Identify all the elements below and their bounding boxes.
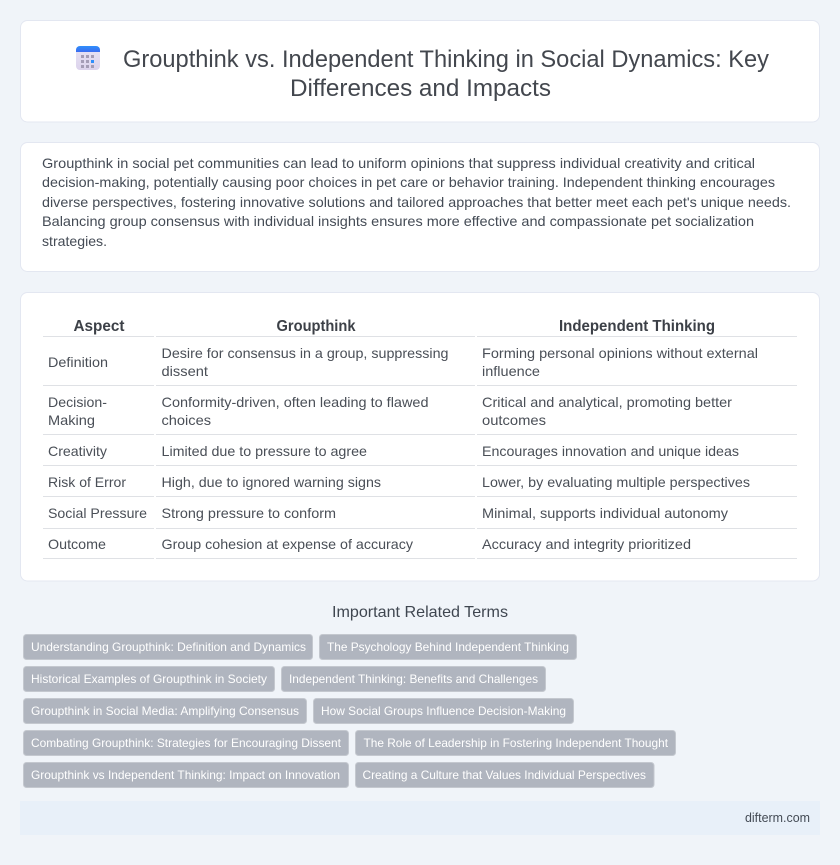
row: definition: Desire for consensus in a group, suppressing: [162, 345, 448, 361]
icon: calendar: [76, 46, 100, 70]
row: decision-making: Decision-: [48, 394, 107, 410]
table header: Independent Thinking: [559, 318, 715, 335]
tag: Independent Thinking: Benefits and Challenges: [289, 672, 538, 686]
tag: [356, 762, 654, 788]
panel: introduction: [20, 142, 820, 272]
table header: Aspect: [74, 318, 125, 335]
footer site name: difterm.com: [745, 810, 810, 825]
row: risk of error: Risk of Error: [48, 474, 126, 490]
title: Differences and Impacts: [290, 75, 551, 102]
row: outcome: Group cohesion at expense of accuracy: [162, 536, 413, 552]
tag: Understanding Groupthink: Definition and Dynamics: [31, 640, 306, 654]
row: decision-making: [48, 394, 732, 428]
tag: The Psychology Behind Independent Thinking: [327, 640, 569, 654]
heading: related terms: Important Related Terms: [332, 604, 508, 621]
row: decision-making: Conformity-driven, often leading to flawed: [162, 394, 428, 410]
row: creativity: Creativity: [48, 443, 107, 459]
tag: [282, 666, 546, 692]
tag: [24, 762, 348, 788]
footer: [20, 801, 820, 835]
related term tags: [24, 634, 676, 788]
intro text: decision-making, potentially causing poor choices in pet care or behavior training. Independent thinking encourages: [42, 174, 775, 190]
intro text: strategies.: [42, 233, 107, 249]
row: decision-making: outcomes: [482, 412, 546, 428]
table header: Groupthink: [276, 318, 356, 335]
tag: [24, 666, 274, 692]
row: outcome: Outcome: [48, 536, 106, 552]
row: risk of error: [48, 474, 750, 490]
row: definition: dissent: [162, 363, 208, 379]
title: Groupthink vs. Independent Thinking in Social Dynamics: Key: [123, 46, 769, 73]
tag: The Role of Leadership in Fostering Independent Thought: [364, 736, 669, 750]
row: social pressure: Social Pressure: [48, 505, 147, 521]
row: social pressure: Minimal, supports individual autonomy: [482, 505, 728, 521]
row: social pressure: [48, 505, 728, 521]
intro text: diverse perspectives, fostering innovative solutions and tailored approaches that better meet each pet's unique needs.: [42, 194, 791, 210]
row: social pressure: Strong pressure to conform: [162, 505, 336, 521]
tag: Combating Groupthink: Strategies for Encouraging Dissent: [31, 736, 342, 750]
row: risk of error: Lower, by evaluating multiple perspectives: [482, 474, 750, 490]
row: decision-making: Making: [48, 412, 95, 428]
row: outcome: Accuracy and integrity prioritized: [482, 536, 691, 552]
row: outcome: [48, 536, 691, 552]
row: definition: influence: [482, 363, 540, 379]
intro text: Groupthink in social pet communities can lead to uniform opinions that suppress individual creativity and critical: [42, 155, 755, 171]
tag: How Social Groups Influence Decision-Making: [321, 704, 566, 718]
row: creativity: Encourages innovation and unique ideas: [482, 443, 739, 459]
tag: [24, 730, 348, 756]
tag: Creating a Culture that Values Individual Perspectives: [362, 768, 646, 782]
row: definition: [48, 345, 758, 379]
table header: [74, 318, 715, 335]
tag: Groupthink in Social Media: Amplifying Consensus: [31, 704, 299, 718]
tag: [24, 698, 306, 724]
tag: [24, 634, 312, 660]
row: creativity: [48, 443, 739, 459]
row: definition: Forming personal opinions without external: [482, 345, 758, 361]
row: creativity: Limited due to pressure to agree: [162, 443, 367, 459]
tag: [356, 730, 676, 756]
intro text: [42, 155, 791, 249]
row: decision-making: choices: [162, 412, 211, 428]
row: risk of error: High, due to ignored warning signs: [162, 474, 381, 490]
tag: Historical Examples of Groupthink in Society: [31, 672, 267, 686]
intro text: Balancing group consensus with individual insights ensures more effective and compassionate pet socialization: [42, 213, 754, 229]
row: decision-making: Critical and analytical, promoting better: [482, 394, 732, 410]
tag: Groupthink vs Independent Thinking: Impact on Innovation: [31, 768, 340, 782]
tag: [320, 634, 576, 660]
header panel: [20, 20, 820, 122]
panel: comparison table: [20, 292, 820, 581]
title: [123, 46, 769, 102]
row: definition: Definition: [48, 354, 108, 370]
tag: [314, 698, 574, 724]
